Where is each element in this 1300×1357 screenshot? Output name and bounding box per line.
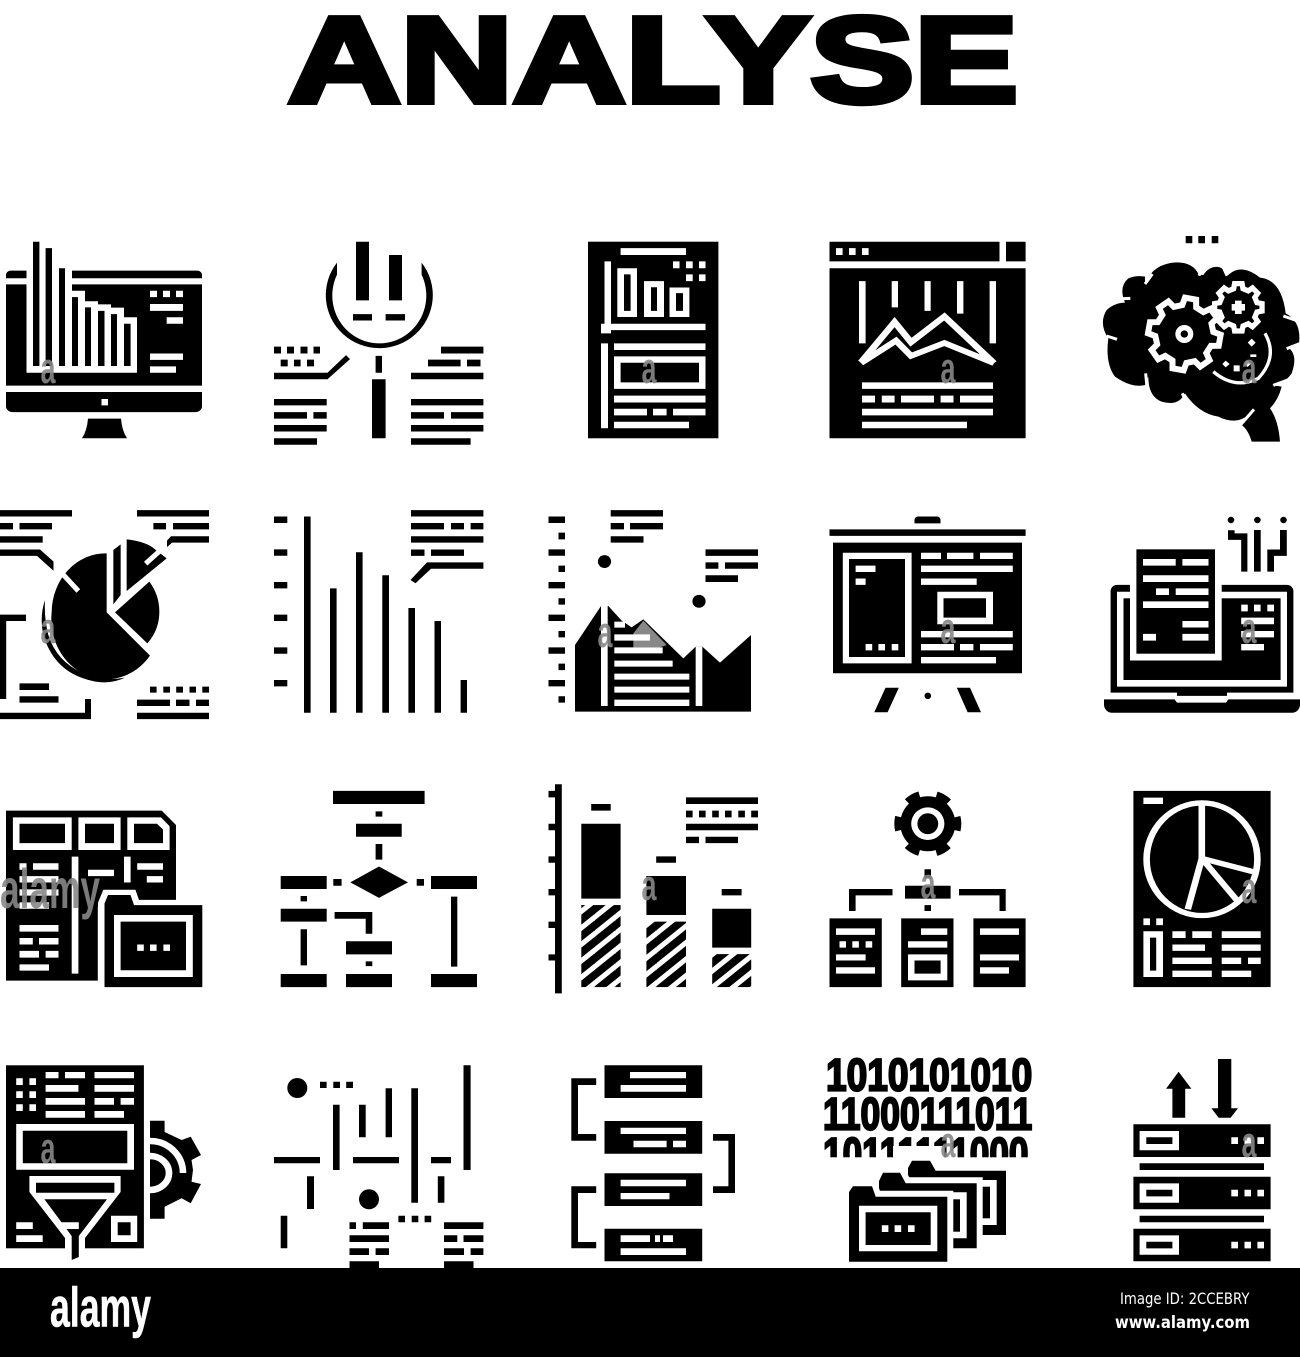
- watermark overlay: a: [1242, 344, 1257, 393]
- icon: browser window with area chart: [830, 242, 1026, 438]
- icon: gear with org chart documents: [830, 788, 1026, 987]
- icon: document with funnel and gear: [6, 1065, 201, 1260]
- watermark overlay: a: [598, 608, 613, 657]
- watermark overlay: a: [920, 859, 936, 908]
- watermark overlay: a: [940, 604, 956, 653]
- website: www.alamy.com: [1115, 1313, 1250, 1333]
- watermark overlay: a: [1242, 1118, 1257, 1167]
- footer logo: alamy: [50, 1276, 151, 1339]
- watermark overlay: a: [40, 344, 56, 393]
- watermark overlay: a: [1242, 604, 1257, 653]
- watermark overlay: a: [40, 1124, 56, 1173]
- icon: binary code with folders: 1010101010: [826, 1050, 1032, 1101]
- watermark overlay: alamy: [0, 857, 100, 920]
- icon: monitor with bar chart: [6, 242, 202, 438]
- icon: binary code with folders: 11000111011: [823, 1089, 1032, 1140]
- icon: binary code with folders: [823, 1050, 1032, 1262]
- watermark overlay: [0, 344, 1257, 1173]
- icon: line chart with dots and text: [274, 1065, 483, 1268]
- icon: document with pie chart: [1133, 791, 1271, 987]
- watermark overlay: a: [940, 344, 956, 393]
- watermark overlay: a: [940, 1118, 956, 1167]
- icon: vertical line chart: [274, 510, 483, 713]
- watermark overlay: a: [40, 604, 56, 653]
- icon: stacked bar chart: [548, 784, 758, 993]
- watermark overlay: a: [1242, 864, 1257, 913]
- icon: flowchart: [281, 791, 477, 987]
- icon: laptop with document and circuit: [1104, 517, 1300, 713]
- watermark overlay: a: [642, 861, 657, 910]
- image id: Image ID: 2CCEBRY: [1120, 1289, 1250, 1308]
- icon: report document with bars: [588, 242, 718, 438]
- icon: binary code with folders: 10111111000: [823, 1128, 1028, 1180]
- icon: brain with gears: [1103, 236, 1300, 442]
- icon: server rack with arrows: [1133, 1059, 1271, 1261]
- icon: linked list of blocks with brackets: [571, 1065, 735, 1261]
- icon: presentation board: [830, 517, 1026, 712]
- icon: document with folder: [6, 811, 202, 987]
- footer band: [0, 1268, 1300, 1357]
- icon: exploded pie chart with labels: [0, 510, 209, 719]
- watermark overlay: a: [642, 344, 657, 393]
- icon: area chart with dots: [548, 510, 758, 712]
- icon: magnifier over documents: [274, 242, 483, 445]
